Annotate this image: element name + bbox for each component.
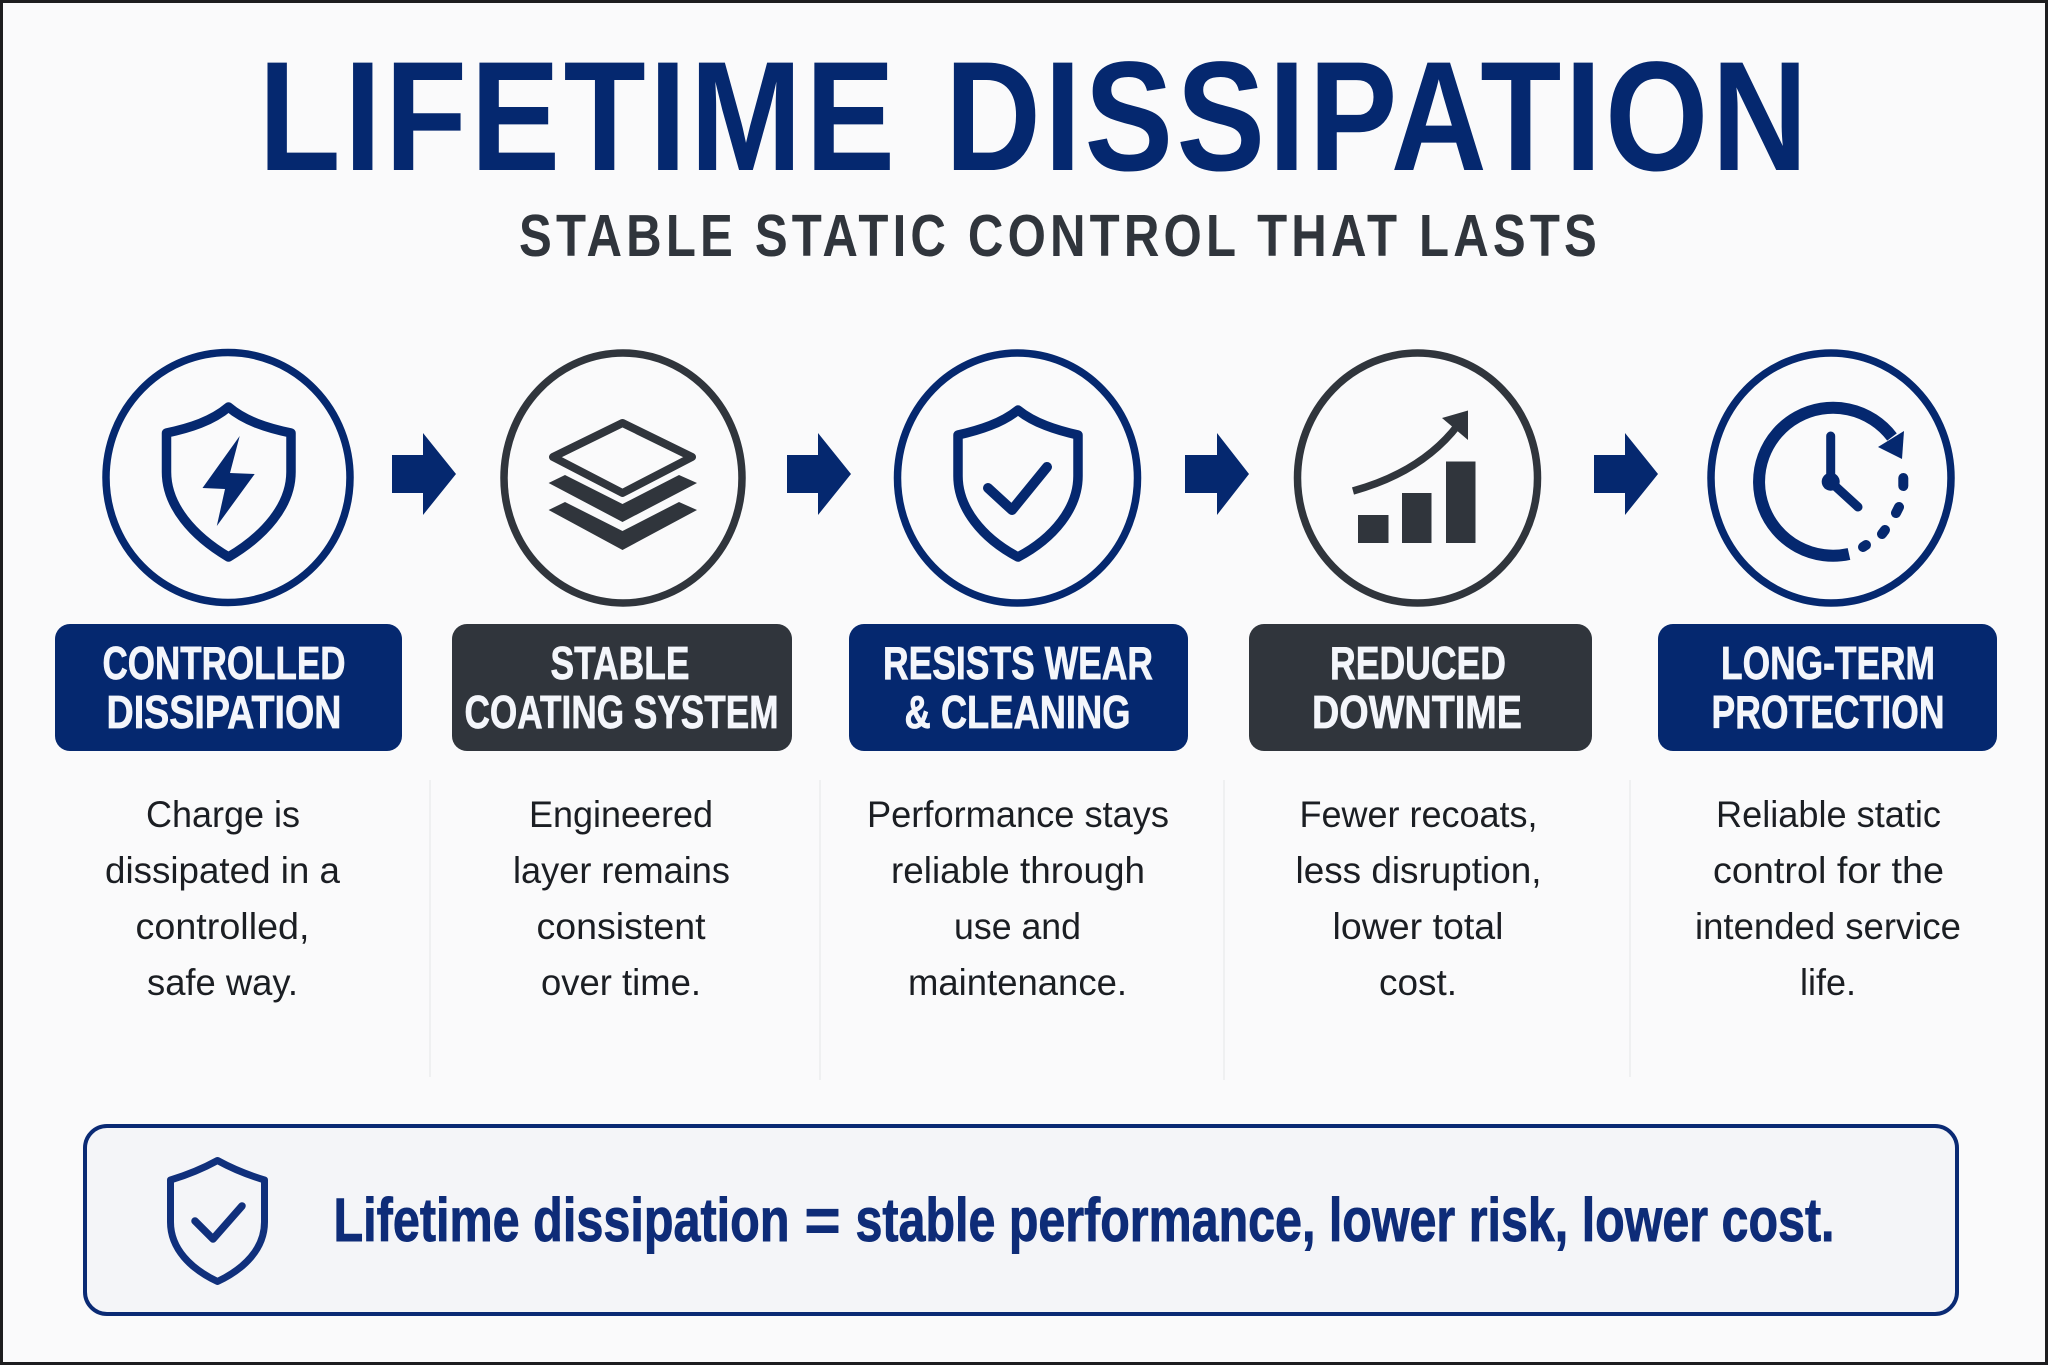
- label: stable coating system: [452, 624, 792, 751]
- description: stable coating system: over time.: [541, 962, 701, 1003]
- arrow 2: [787, 433, 851, 515]
- description: long-term protection: control for the: [1713, 850, 1944, 891]
- description: controlled dissipation: safe way.: [147, 962, 298, 1003]
- description: controlled dissipation: [105, 794, 340, 1003]
- label: resists wear and cleaning: [849, 624, 1188, 751]
- description: controlled dissipation: controlled,: [136, 906, 310, 947]
- arrow 1: [392, 433, 456, 515]
- description: long-term protection: intended service: [1695, 906, 1961, 947]
- description: resists wear and cleaning: use and: [954, 906, 1081, 947]
- description: controlled dissipation: dissipated in a: [105, 850, 340, 891]
- callout: summary banner: [85, 1126, 1957, 1314]
- label: reduced downtime: REDUCED: [1330, 637, 1506, 689]
- icon: shield with lightning bolt: [106, 352, 350, 602]
- summary text: =: [804, 1186, 840, 1254]
- step 5: long-term protection: [1658, 353, 1997, 1003]
- description: resists wear and cleaning: Performance stays: [867, 794, 1169, 835]
- description: long-term protection: [1695, 794, 1961, 1003]
- description: stable coating system: consistent: [536, 906, 706, 947]
- description: long-term protection: life.: [1800, 962, 1856, 1003]
- icon: shield with check: [170, 1160, 264, 1282]
- description: reduced downtime: [1296, 794, 1542, 1003]
- step 1: controlled dissipation: [55, 352, 402, 1003]
- arrow 3: [1185, 433, 1249, 515]
- label: long-term protection: [1658, 624, 1997, 751]
- label: long-term protection: LONG-TERM: [1721, 637, 1935, 689]
- icon: clock with circular arrow: [1711, 353, 1951, 603]
- subtitle: STABLE STATIC CONTROL THAT LASTS: [519, 203, 1601, 269]
- arrow 4: [1594, 433, 1658, 515]
- label: reduced downtime: DOWNTIME: [1312, 686, 1522, 738]
- label: stable coating system: COATING SYSTEM: [464, 686, 778, 738]
- step 2: stable coating system: [452, 353, 792, 1003]
- description: reduced downtime: cost.: [1379, 962, 1457, 1003]
- title: LIFETIME: [258, 30, 898, 204]
- label: stable coating system: STABLE: [550, 637, 690, 689]
- label: controlled dissipation: [55, 624, 402, 751]
- label: resists wear and cleaning: & CLEANING: [904, 686, 1130, 738]
- description: reduced downtime: less disruption,: [1296, 850, 1542, 891]
- description: controlled dissipation: Charge is: [146, 794, 300, 835]
- title: [258, 30, 1811, 204]
- description: long-term protection: Reliable static: [1716, 794, 1941, 835]
- summary text: Lifetime dissipation: [334, 1186, 790, 1254]
- summary text: [334, 1186, 1834, 1254]
- description: stable coating system: [513, 794, 730, 1003]
- step 4: reduced downtime: [1249, 353, 1592, 1003]
- description: stable coating system: layer remains: [513, 850, 730, 891]
- icon: shield with check: [898, 353, 1138, 603]
- description: reduced downtime: Fewer recoats,: [1300, 794, 1538, 835]
- label: resists wear and cleaning: RESISTS WEAR: [883, 637, 1153, 689]
- label: controlled dissipation: CONTROLLED: [102, 637, 346, 689]
- description: resists wear and cleaning: [867, 794, 1169, 1003]
- label: controlled dissipation: DISSIPATION: [106, 686, 342, 738]
- description: resists wear and cleaning: maintenance.: [908, 962, 1127, 1003]
- icon: stacked layers: [504, 353, 742, 603]
- label: reduced downtime: [1249, 624, 1592, 751]
- title: DISSIPATION: [945, 30, 1811, 204]
- description: reduced downtime: lower total: [1332, 906, 1504, 947]
- icon: rising bar chart: [1298, 353, 1538, 603]
- step 3: resists wear and cleaning: [849, 353, 1188, 1003]
- description: resists wear and cleaning: reliable through: [891, 850, 1145, 891]
- description: stable coating system: Engineered: [529, 794, 713, 835]
- label: long-term protection: PROTECTION: [1712, 686, 1944, 738]
